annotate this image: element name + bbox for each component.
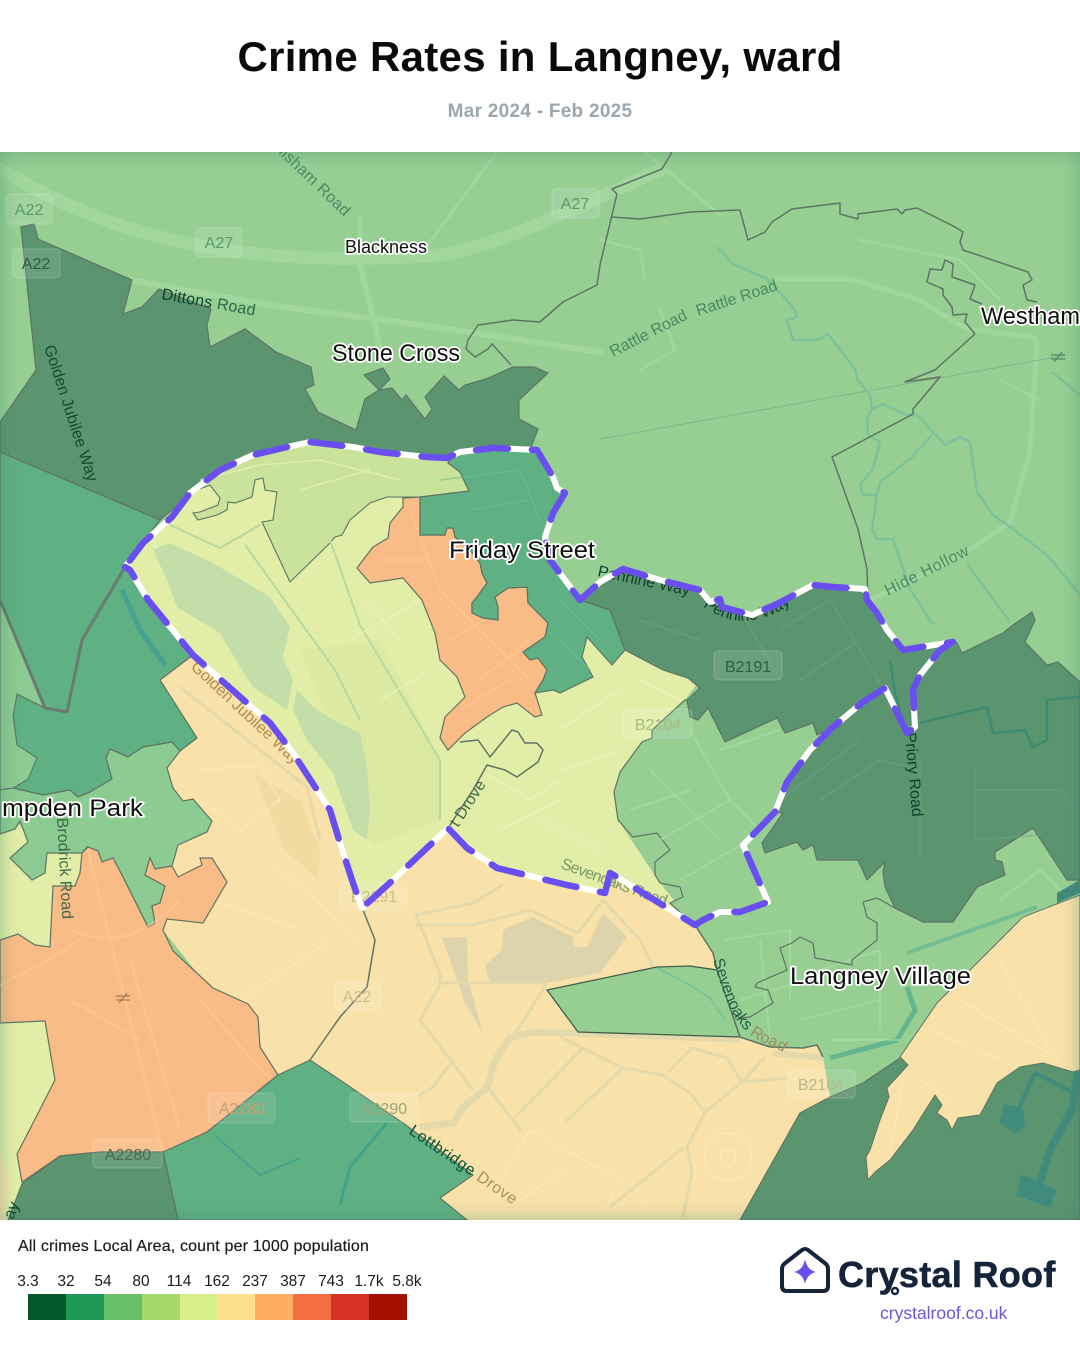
park tint in ward centre [300,640,440,845]
logo: Crystal Roof [780,1247,1056,1323]
road shield labels: B2191 [351,889,397,906]
legend tick labels: 3.3 [17,1273,39,1290]
region: ward pale yellow-green [125,442,700,928]
region: light green south enclosed [547,966,740,1037]
street names: Rattle Road [607,307,690,361]
street names: Golden Jubilee Way [187,658,303,768]
icon: rail station east [1051,352,1065,362]
legend tick labels: 743 [318,1273,344,1290]
place names: mpden Park [2,795,144,822]
region: Friday Street orange [357,497,548,750]
region: ward upper green tint [192,442,469,582]
buildings south-east [1000,1072,1078,1207]
region: dark green north-west [0,224,548,520]
street names: Sevenoaks Road [714,958,788,1052]
place names [2,237,1080,990]
road shield labels: A2280 [105,1147,151,1164]
region: dark green east [580,569,1080,922]
legend tick labels: 5.8k [392,1273,422,1290]
place names: Friday Street [449,537,595,564]
region: dark green south-east [740,1050,1080,1220]
legend tick labels: 114 [167,1273,192,1290]
map: crime choropleth [0,152,1080,1220]
road shield labels: A2280 [219,1101,265,1118]
river and streets in Langney Village [725,870,1060,1058]
street names: Hide Hollow [882,542,972,600]
region: tan south [100,655,830,1220]
place names: Langney Village [790,963,971,990]
road shield labels: A22 [343,989,371,1006]
boundaries [0,152,1037,1060]
region: green south-west [163,1060,473,1220]
ward boundary [125,442,953,925]
legend tick labels: 54 [94,1273,112,1290]
legend title: All crimes Local Area, count per 1000 population [18,1238,369,1255]
street names: Golden Jubilee Way [40,343,100,484]
street names: Lottbridge Drove [406,1122,520,1208]
region: mid green west [0,742,212,927]
street names: Rattle Road [694,278,780,320]
road shields [6,189,855,1168]
road shield labels: A22 [22,256,50,273]
legend tick labels: 237 [242,1273,268,1290]
road shield labels: A27 [205,235,233,252]
legend: colour scale [17,1273,422,1320]
legend tick labels: 1.7k [354,1273,384,1290]
street names: Pennine Way [704,598,788,621]
region: pale west [0,820,85,950]
region: tan east [866,895,1080,1180]
road shield labels: A2290 [361,1101,407,1118]
region: orange west [0,847,278,1182]
region: lake tint [153,543,293,710]
street names: Dittons Road [160,286,257,319]
region: teal green west [0,452,197,797]
road shield labels: B2104 [635,717,681,734]
street names: t Drove [447,777,490,830]
legend tick labels: 32 [57,1273,75,1290]
region: light green south-east of ward [614,700,832,928]
road shield labels: B2191 [725,659,771,676]
street names: Priory Road [901,732,925,818]
icon: rail station west [116,993,130,1003]
subtitle: date range: Mar 2024 - Feb 2025 [448,101,632,122]
wordmark: Crystal Roof [838,1254,1056,1295]
url: crystalroof.co.uk [880,1303,1007,1323]
street names: Sevenoaks Road [559,856,670,910]
road shield labels: B2104 [798,1077,844,1094]
region: dark green south-west corner [8,1152,178,1220]
legend tick labels: 80 [132,1273,150,1290]
title: Crime Rates in Langney, ward [237,33,843,80]
icon: house with star [780,1247,830,1293]
legend tick labels [17,1273,422,1290]
region: light green far west [0,600,45,790]
legend tick labels: 162 [204,1273,230,1290]
tan shading near Golden Jubilee Way [253,773,320,880]
street names [1,152,972,1220]
rivers [717,247,1080,625]
street names: Brodrick Road [53,817,75,919]
place names: Stone Cross [332,340,460,367]
logo key mark under y [890,1286,900,1296]
road shield labels: A27 [561,196,589,213]
vignette: map edge shade [0,146,1080,1226]
street names: Pennine Way [596,563,692,599]
road shield labels: A22 [15,202,43,219]
place names: Blackness [345,237,427,257]
legend tick labels: 387 [280,1273,306,1290]
road shield labels [15,196,844,1164]
place names: Westham [981,303,1080,330]
region: Friday Street green [420,448,625,693]
legend colour swatches [28,1294,407,1320]
